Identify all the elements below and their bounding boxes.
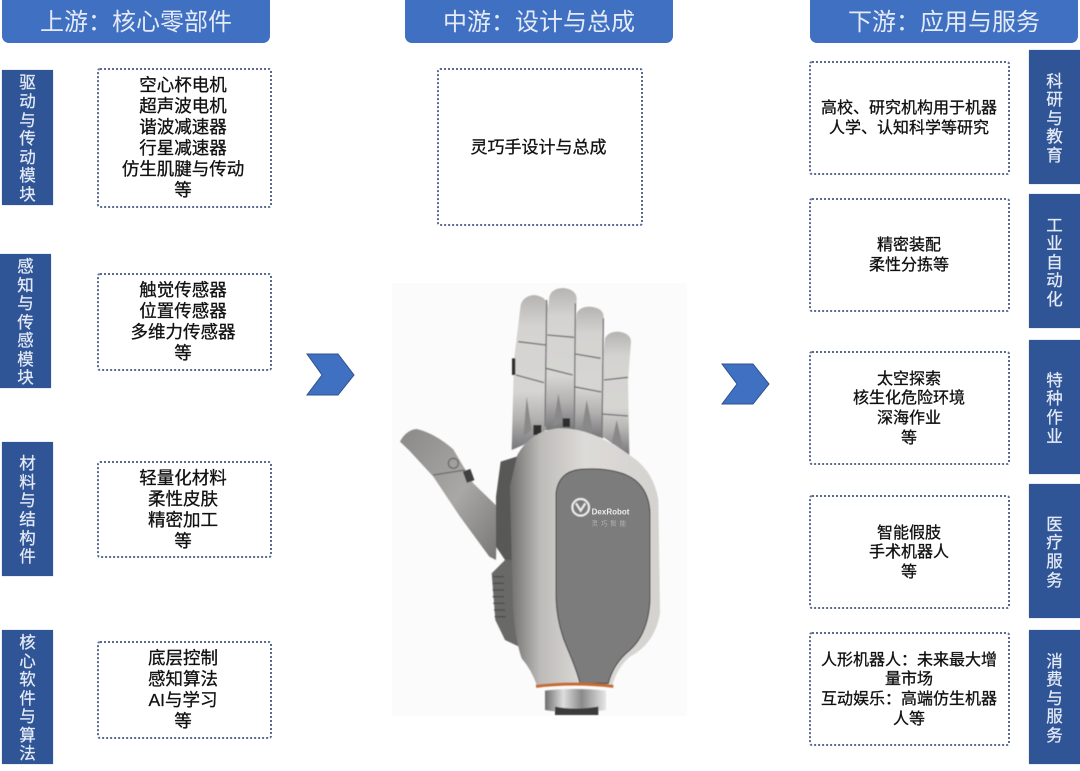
panel: consumer uses [809, 632, 1010, 746]
label: sensing module: 感 [17, 258, 34, 276]
label: research and education: 与 [1046, 110, 1063, 128]
label: core software and algorithms: 与 [19, 708, 36, 726]
label: consumer and services: 服 [1046, 708, 1063, 726]
panel: medical uses: 等 [901, 564, 917, 581]
label: medical services: 服 [1046, 553, 1063, 571]
panel: medical uses [809, 495, 1010, 609]
panel: special operations uses [809, 351, 1010, 465]
label: industrial automation [1029, 194, 1080, 328]
panel: special operations uses: 等 [901, 430, 917, 447]
panel: materials items: 柔性皮肤 [148, 488, 218, 508]
panel: software items: 等 [174, 711, 192, 731]
arrow: upstream to midstream [306, 354, 354, 396]
label: medical services [1029, 484, 1080, 618]
panel: drive and transmission items: 仿生肌腱与传动 [122, 159, 244, 179]
finger base streaks [523, 393, 623, 448]
heading: upstream: 上游：核心零部件 [40, 9, 232, 36]
label: industrial automation: 动 [1046, 272, 1063, 290]
label: consumer and services: 务 [1046, 727, 1063, 745]
label: core software and algorithms: 算 [19, 727, 36, 745]
label: special operations: 种 [1046, 390, 1063, 408]
label: sensing module: 与 [17, 295, 34, 313]
panel: drive and transmission items: 空心杯电机 [139, 75, 227, 95]
panel: medical uses: 智能假肢 [877, 525, 941, 542]
image: DexRobot dexterous hand [400, 287, 660, 716]
finger: ring [574, 307, 604, 438]
panel: consumer uses: 量市场 [885, 671, 933, 688]
label: drive and transmission module: 驱 [19, 74, 36, 92]
label: sensing module: 传 [17, 314, 34, 332]
thumb joints [433, 458, 465, 475]
panel: drive and transmission items [97, 68, 272, 208]
panel: software items: 感知算法 [148, 669, 218, 689]
label: drive and transmission module: 动 [19, 93, 36, 111]
label: core software and algorithms: 件 [19, 690, 36, 708]
label: core software and algorithms: 软 [19, 671, 36, 689]
label: special operations [1029, 340, 1080, 474]
panel: drive and transmission items: 等 [174, 180, 192, 200]
grip ribs [493, 577, 506, 617]
label: consumer and services [1029, 630, 1080, 764]
heading: midstream [405, 0, 673, 43]
label: special operations: 特 [1046, 372, 1063, 390]
logo mark [572, 499, 589, 516]
panel: medical uses: 手术机器人 [869, 544, 949, 561]
label: industrial automation: 自 [1046, 254, 1063, 272]
label: industrial automation: 化 [1046, 291, 1063, 309]
panel: consumer uses: 人等 [893, 711, 925, 728]
label: industrial automation: 业 [1046, 235, 1063, 253]
label: medical services: 医 [1046, 516, 1063, 534]
panel: dexterous hand design and assembly: 灵巧手设计与总成 [470, 138, 606, 156]
label: materials and structure: 材 [19, 455, 36, 473]
label: consumer and services: 费 [1046, 671, 1063, 689]
label: research and education: 科 [1046, 73, 1063, 91]
label: consumer and services: 与 [1046, 690, 1063, 708]
panel: consumer uses: 人形机器人：未来最大增 [821, 652, 997, 669]
label: medical services: 务 [1046, 572, 1063, 590]
panel: special operations uses: 深海作业 [877, 410, 941, 427]
label: core software and algorithms [2, 630, 53, 764]
panel: research and education uses: 高校、研究机构用于机器 [821, 100, 997, 117]
label: materials and structure: 料 [19, 474, 36, 492]
panel: research and education uses [809, 61, 1010, 175]
orange ring [536, 684, 613, 686]
label: special operations: 作 [1046, 409, 1063, 427]
heading: midstream: 中游：设计与总成 [443, 9, 635, 36]
finger base pins [512, 358, 570, 435]
panel: special operations uses: 太空探索 [877, 371, 941, 388]
finger: index [512, 295, 548, 450]
back panel [556, 469, 650, 683]
logo text: DexRobot [592, 508, 630, 517]
panel: dexterous hand design and assembly [437, 68, 643, 226]
dark side housing [496, 455, 528, 561]
panel: software items: AI与学习 [148, 690, 218, 710]
panel: software items: 底层控制 [148, 648, 218, 668]
label: core software and algorithms: 心 [19, 653, 36, 671]
arrow: midstream to downstream [721, 364, 770, 404]
label: core software and algorithms: 法 [19, 745, 36, 763]
panel: drive and transmission items: 谐波减速器 [139, 117, 227, 137]
label: sensing module: 块 [17, 369, 34, 387]
panel: software items [97, 641, 272, 739]
panel: drive and transmission items: 行星减速器 [139, 138, 227, 158]
label: materials and structure [2, 442, 53, 576]
label: drive and transmission module: 块 [19, 186, 36, 204]
metal connector [545, 689, 606, 712]
label: materials and structure: 结 [19, 511, 36, 529]
label: drive and transmission module: 与 [19, 112, 36, 130]
label: research and education: 育 [1046, 147, 1063, 165]
label: core software and algorithms: 核 [19, 634, 36, 652]
panel: industrial automation uses [809, 198, 1010, 312]
panel: sensing items: 位置传感器 [139, 301, 227, 321]
label: sensing module [0, 254, 51, 388]
panel: materials items [97, 461, 272, 558]
thumb [400, 429, 497, 560]
panel: research and education uses: 人学、认知科学等研究 [829, 120, 989, 137]
label: materials and structure: 与 [19, 492, 36, 510]
heading: downstream: 下游：应用与服务 [848, 9, 1040, 36]
finger joints [516, 335, 628, 416]
label: special operations: 业 [1046, 428, 1063, 446]
label: medical services: 疗 [1046, 534, 1063, 552]
label: research and education: 研 [1046, 91, 1063, 109]
finger: little [601, 332, 631, 455]
label: drive and transmission module: 模 [19, 167, 36, 185]
heading: downstream [810, 0, 1078, 43]
panel: industrial automation uses: 精密装配 [877, 237, 941, 254]
label: drive and transmission module: 动 [19, 149, 36, 167]
panel: consumer uses: 互动娱乐：高端仿生机器 [821, 691, 997, 708]
panel: materials items: 等 [174, 530, 192, 550]
panel: industrial automation uses: 柔性分拣等 [869, 257, 949, 274]
panel: materials items: 精密加工 [148, 510, 218, 530]
panel: sensing items: 等 [174, 343, 192, 363]
label: industrial automation: 工 [1046, 217, 1063, 235]
panel: drive and transmission items: 超声波电机 [139, 96, 227, 116]
label: research and education [1029, 50, 1080, 184]
panel: materials items: 轻量化材料 [139, 468, 227, 488]
finger: middle [545, 288, 577, 430]
panel: sensing items: 触觉传感器 [139, 280, 227, 300]
label: materials and structure: 件 [19, 548, 36, 566]
label: consumer and services: 消 [1046, 653, 1063, 671]
palm shell [510, 428, 660, 685]
label: drive and transmission module [2, 70, 53, 205]
grip [492, 560, 537, 655]
logo subtitle: 灵巧智能 [592, 518, 629, 527]
heading: upstream [2, 0, 270, 43]
panel: sensing items: 多维力传感器 [130, 322, 236, 342]
label: materials and structure: 构 [19, 530, 36, 548]
panel: special operations uses: 核生化危险环境 [853, 390, 965, 407]
photo background [392, 283, 687, 716]
label: drive and transmission module: 传 [19, 130, 36, 148]
label: sensing module: 模 [17, 351, 34, 369]
finger gaps [545, 300, 603, 435]
label: research and education: 教 [1046, 128, 1063, 146]
panel: sensing items [97, 273, 272, 371]
label: sensing module: 知 [17, 277, 34, 295]
label: sensing module: 感 [17, 332, 34, 350]
